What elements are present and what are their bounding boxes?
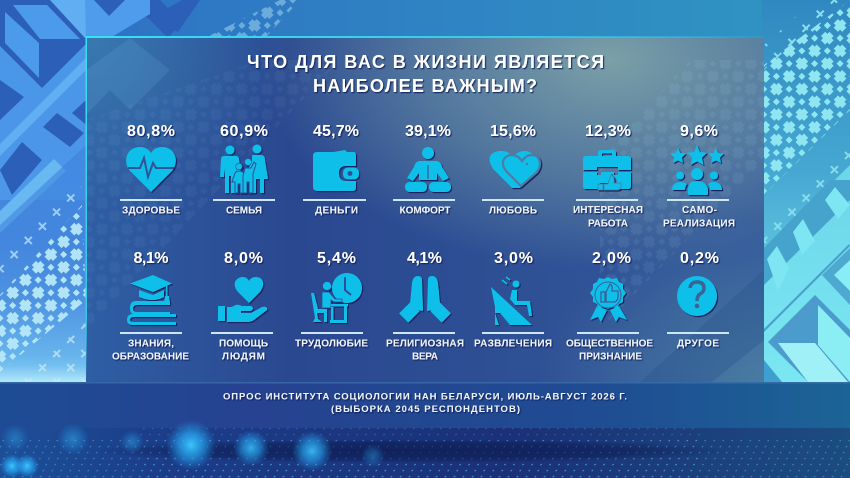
- item: помощь людям: [211, 250, 273, 362]
- background: right ornament: [762, 0, 850, 382]
- item: здоровье: [120, 123, 182, 216]
- source note: ОПРОС ИНСТИТУТА СОЦИОЛОГИИ НАН БЕЛАРУСИ, ИЮЛЬ-АВГУСТ 2026 Г.: [223, 392, 627, 402]
- item: другое: [667, 250, 729, 350]
- item: семья: [213, 123, 275, 216]
- value: 80,8%: [127, 123, 175, 140]
- value: 2,0%: [592, 250, 631, 267]
- label second line: РАБОТА: [588, 218, 628, 230]
- label: ИНТЕРЕСНАЯ: [573, 205, 643, 216]
- value: 12,3%: [585, 123, 631, 140]
- label: ОБЩЕСТВЕННОЕ: [566, 338, 653, 350]
- label second line: РЕАЛИЗАЦИЯ: [663, 218, 735, 230]
- background: top band: [50, 0, 766, 40]
- item: знания, образование: [112, 250, 189, 362]
- icon: person on a slide: [491, 277, 532, 325]
- value: 3,0%: [494, 250, 533, 267]
- item: общественное признание: [566, 250, 653, 362]
- icon: question mark: [677, 276, 717, 316]
- icon: badge with thumb up: [590, 277, 627, 322]
- icon: worker at desk with clock: [311, 273, 362, 323]
- title: ЧТО ДЛЯ ВАС В ЖИЗНИ ЯВЛЯЕТСЯ: [247, 52, 604, 72]
- value: 8,1%: [134, 250, 168, 267]
- label: ПОМОЩЬ: [219, 338, 268, 350]
- icon: hand holding heart: [218, 277, 267, 322]
- label: САМО-: [682, 205, 717, 216]
- label second line: ВЕРА: [412, 352, 438, 362]
- item: интересная работа: [573, 123, 643, 230]
- title: [247, 52, 604, 96]
- label: ДРУГОЕ: [677, 338, 719, 350]
- value: 0,2%: [680, 250, 719, 267]
- value: 8,0%: [224, 250, 263, 267]
- source note: [223, 392, 627, 415]
- icon: heart with pulse: [126, 147, 176, 192]
- source note: (ВЫБОРКА 2045 РЕСПОНДЕНТОВ): [331, 404, 520, 415]
- label: ЗНАНИЯ,: [128, 338, 174, 350]
- item: трудолюбие: [295, 250, 368, 350]
- icon: two hearts: [490, 151, 540, 188]
- icon: three stars and people: [670, 145, 724, 195]
- label: РАЗВЛЕЧЕНИЯ: [474, 338, 552, 350]
- icon: meditating person: [405, 147, 451, 192]
- value: 39,1%: [405, 123, 451, 140]
- value: 15,6%: [490, 123, 536, 140]
- value: 45,7%: [313, 123, 359, 140]
- item: любовь: [482, 123, 544, 216]
- icon: graduation cap on books: [127, 275, 176, 325]
- label second line: ОБРАЗОВАНИЕ: [112, 352, 189, 362]
- footer band and floor: [0, 382, 850, 478]
- label: СЕМЬЯ: [226, 206, 262, 216]
- background: left ornament: [0, 0, 156, 382]
- label: РЕЛИГИОЗНАЯ: [386, 338, 464, 350]
- item: самореализация: [663, 123, 735, 230]
- panel: [86, 36, 764, 382]
- label: КОМФОРТ: [400, 206, 450, 216]
- item: развлечения: [474, 250, 552, 350]
- label second line: ЛЮДЯМ: [222, 352, 265, 362]
- value: 60,9%: [220, 123, 268, 140]
- icon: briefcase with thumb up: [583, 150, 631, 190]
- label: ТРУДОЛЮБИЕ: [295, 338, 368, 350]
- icon: praying hands: [399, 276, 451, 323]
- item: комфорт: [393, 123, 455, 216]
- label: ДЕНЬГИ: [315, 206, 358, 216]
- label: ЛЮБОВЬ: [489, 206, 537, 216]
- label second line: ПРИЗНАНИЕ: [579, 352, 642, 362]
- value: 5,4%: [317, 250, 356, 267]
- label: ЗДОРОВЬЕ: [122, 206, 180, 216]
- icon: wallet: [313, 150, 359, 191]
- icon: family: [220, 144, 268, 193]
- value: 9,6%: [680, 123, 718, 140]
- value: 4,1%: [407, 250, 442, 267]
- item: религиозная вера: [386, 250, 464, 362]
- title: НАИБОЛЕЕ ВАЖНЫМ?: [313, 76, 537, 96]
- item: деньги: [303, 123, 366, 216]
